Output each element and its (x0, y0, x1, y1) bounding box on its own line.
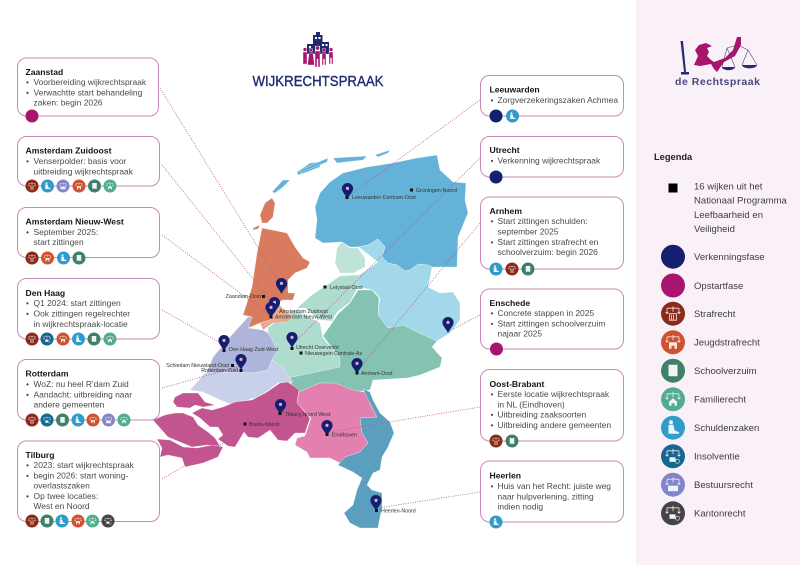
panel: Amsterdam Nieuw-West (18, 208, 160, 264)
panel: Zaanstad (18, 58, 158, 122)
region: den haag (205, 317, 277, 377)
panel: Tilburg: begin 2026: start woning- (34, 470, 128, 480)
panel: Oost-Brabant: in NL (Eindhoven) (498, 400, 565, 410)
title icon: buildings and people (303, 32, 333, 67)
panel: Enschede: Start zittingen schoolverzuim (498, 318, 605, 328)
panel: Den Haag: • (26, 308, 29, 318)
panel: Arnhem: Start zittingen strafrecht en (498, 237, 599, 247)
panel: Utrecht: • (490, 156, 494, 166)
panel: Arnhem (480, 197, 624, 276)
panel: Zaanstad: • (26, 88, 29, 98)
panel: Oost-Brabant: Uitbreiding andere gemeenten (498, 420, 611, 430)
panel: Enschede: najaar 2025 (498, 328, 542, 338)
panel: Utrecht (480, 136, 624, 184)
map labels: Nieuwegein Centrale-As (305, 351, 362, 357)
panel: Rotterdam: WoZ: nu heel R'dam Zuid (34, 379, 129, 389)
panel: Arnhem: september 2025 (498, 226, 559, 236)
legend item: Schoolverzuim (661, 359, 757, 383)
panel: Leeuwarden: Leeuwarden (490, 84, 540, 94)
panel: Amsterdam Nieuw-West: Amsterdam Nieuw-West (26, 216, 124, 226)
legend item: Familierecht: Familierecht (694, 395, 746, 406)
legend item: Opstartfase: Opstartfase (694, 281, 743, 292)
panel: Tilburg: • (26, 470, 29, 480)
legend heading: Legenda (654, 152, 693, 162)
legend item: Kantonrecht (661, 501, 746, 525)
panel: Tilburg: Tilburg (26, 450, 54, 460)
panel: Amsterdam Nieuw-West: • (26, 227, 29, 237)
panel: Rotterdam: • (26, 390, 29, 400)
panel: Utrecht: Utrecht (490, 145, 520, 155)
panel: Leeuwarden: Zorgverzekeringszaken Achmea (498, 95, 618, 105)
logo: de Rechtspraak (675, 37, 760, 88)
map locations (166, 183, 457, 514)
panel: Oost-Brabant (480, 370, 624, 448)
legend item: Jeugdstrafrecht (661, 330, 760, 354)
panel: Arnhem: Start zittingen schulden: (498, 216, 588, 226)
panel: Enschede: Concrete stappen in 2025 (498, 308, 594, 318)
panel: Amsterdam Zuidoost: • (26, 156, 29, 166)
region: amsterdam (260, 303, 293, 330)
panel: Oost-Brabant: Eerste locatie wijkrechtspraak (498, 389, 610, 399)
region: gelderland (288, 290, 442, 393)
panel: Utrecht: Verkenning wijkrechtspraak (498, 156, 601, 166)
region: zeeland and west-brabant (153, 382, 310, 467)
panel: Rotterdam: Rotterdam (26, 368, 69, 378)
panel: Zaanstad: zaken: begin 2026 (34, 98, 103, 108)
legend item: Schuldenzaken: Schuldenzaken (694, 423, 759, 434)
panel: Arnhem: • (490, 237, 494, 247)
panel: Heerlen: Huis van het Recht: juiste weg (498, 481, 611, 491)
panel: Heerlen (480, 461, 624, 528)
panel: Arnhem: • (490, 216, 494, 226)
legend item: Insolventie: Insolventie (694, 452, 740, 463)
panel: Den Haag: Ook zittingen regelrechter (34, 308, 130, 318)
map labels: Utrecht Overvecht (296, 345, 339, 351)
panel: Den Haag: Q1 2024: start zittingen (34, 298, 121, 308)
legend item: Bestuursrecht (661, 473, 753, 497)
panel: Oost-Brabant: Uitbreiding zaaksoorten (498, 410, 586, 420)
neighbourhood squares (222, 188, 413, 512)
map labels: Zaandam-Oost (226, 294, 262, 300)
panel: Enschede: • (490, 308, 494, 318)
map labels: Arnhem-Oost (361, 371, 393, 377)
panel: Amsterdam Nieuw-West: start zittingen (34, 237, 84, 247)
panel: Rotterdam (18, 360, 160, 426)
panel: Den Haag: • (26, 298, 29, 308)
map labels (166, 188, 457, 514)
legend item: Verkenningsfase (661, 245, 765, 269)
pins (218, 183, 454, 511)
panel: Tilburg: overlastszaken (34, 480, 90, 490)
legend item: wijken: Leefbaarheid en (694, 210, 763, 221)
panel: Oost-Brabant: • (490, 389, 494, 399)
panel: Rotterdam: • (26, 379, 29, 389)
legend item: wijken: Nationaal Programma (694, 196, 788, 206)
map labels: Schiedam Nieuwland-Oost (166, 363, 230, 369)
panel: Zaanstad: Zaanstad (26, 67, 63, 77)
legend item: wijken (668, 182, 788, 235)
region: rotterdam (190, 360, 293, 405)
panel: Tilburg (18, 441, 160, 528)
panel: Den Haag: in wijkrechtspraak-locatie (34, 319, 128, 329)
map labels: Leeuwarden Centrum-Oost (352, 195, 416, 201)
map labels: Eindhoven (332, 432, 357, 438)
panel: Amsterdam Zuidoost (18, 136, 160, 192)
panel: Oost-Brabant: Oost-Brabant (490, 379, 545, 389)
legend item: Opstartfase (661, 274, 743, 298)
map labels: Breda-Noord (249, 422, 279, 428)
panel: Tilburg: • (26, 491, 29, 501)
legend item: Strafrecht (661, 302, 736, 326)
region: oost-brabant (295, 383, 377, 463)
panel: Heerlen: Heerlen (490, 470, 521, 480)
legend item: Insolventie (661, 444, 740, 468)
panel: Enschede: • (490, 318, 494, 328)
region: noord-holland (243, 198, 310, 328)
legend item: Familierecht (661, 387, 746, 411)
map labels: Groningen-Noord (416, 188, 457, 194)
panel: Heerlen: naar hulpverlening, zitting (498, 492, 594, 502)
map labels: Den Haag Zuid-West (229, 347, 279, 353)
panel: Heerlen: • (490, 481, 494, 491)
map labels: Amsterdam Zuidoost (279, 309, 328, 315)
region: limburg (338, 389, 394, 528)
map labels: Amsterdam Nieuw-West (275, 314, 333, 320)
panel: Amsterdam Zuidoost: Venserpolder: basis voor (34, 156, 127, 166)
panel: Amsterdam Nieuw-West: September 2025: (34, 227, 98, 237)
legend item: Schoolverzuim: Schoolverzuim (694, 366, 757, 377)
panel: Arnhem: schoolverzuim: begin 2026 (498, 247, 598, 257)
legend item: Bestuursrecht: Bestuursrecht (694, 480, 753, 491)
legend (654, 152, 788, 525)
region: flevoland and utrecht (268, 275, 358, 378)
map labels: Tilburg Noord West (285, 412, 331, 418)
panel: Tilburg: West en Noord (34, 501, 90, 511)
panel: Arnhem: Arnhem (490, 206, 522, 216)
panel: Leeuwarden (480, 76, 624, 122)
panel: Tilburg: Op twee locaties: (34, 491, 98, 501)
legend item: Jeugdstrafrecht: Jeugdstrafrecht (694, 338, 760, 349)
panel: Enschede: Enschede (490, 298, 530, 308)
panel: Tilburg: 2023: start wijkrechtspraak (34, 460, 135, 470)
panel: Leeuwarden: • (490, 95, 494, 105)
legend item: Verkenningsfase: Verkenningsfase (694, 252, 765, 263)
panel: Tilburg: • (26, 460, 29, 470)
panel: Amsterdam Zuidoost: uitbreiding wijkrechtspraak (34, 166, 134, 176)
panel: Oost-Brabant: • (490, 420, 494, 430)
panel: Enschede (480, 289, 624, 356)
panel: Oost-Brabant: • (490, 410, 494, 420)
panel: Heerlen: indien nodig (498, 502, 543, 512)
panel: Rotterdam: andere gemeenten (34, 400, 105, 410)
panel: Amsterdam Zuidoost: Amsterdam Zuidoost (26, 146, 112, 156)
panel: Zaanstad: • (26, 77, 29, 87)
panel: Den Haag (18, 278, 160, 346)
map of the Netherlands (153, 150, 468, 528)
map labels: Heerlen-Noord (381, 508, 416, 514)
panel: Den Haag: Den Haag (26, 288, 65, 298)
panel: Rotterdam: Aandacht: uitbreiding naar (34, 390, 132, 400)
connector lines (160, 88, 480, 508)
logo mark (680, 37, 757, 74)
region: overijssel (356, 239, 460, 341)
map labels: Rotterdam-Zuid (201, 368, 238, 374)
legend item: wijken: Veiligheid (694, 224, 735, 235)
legend item: Strafrecht: Strafrecht (694, 309, 736, 320)
legend item: wijken: 16 wijken uit het (694, 182, 763, 192)
legend item: Schuldenzaken (661, 416, 759, 440)
legend side panel (636, 0, 800, 565)
map labels: Lelystad-Oost (330, 285, 363, 291)
region: noord blue (272, 150, 468, 271)
title: WIJKRECHTSPRAAK (252, 73, 384, 90)
logo text: de Rechtspraak (675, 76, 760, 88)
panel: Zaanstad: Voorbereiding wijkrechtspraak (34, 77, 147, 87)
legend item: Kantonrecht: Kantonrecht (694, 509, 746, 520)
region: noordoostpolder (335, 242, 365, 273)
panel: Zaanstad: Verwachtte start behandeling (34, 88, 143, 98)
